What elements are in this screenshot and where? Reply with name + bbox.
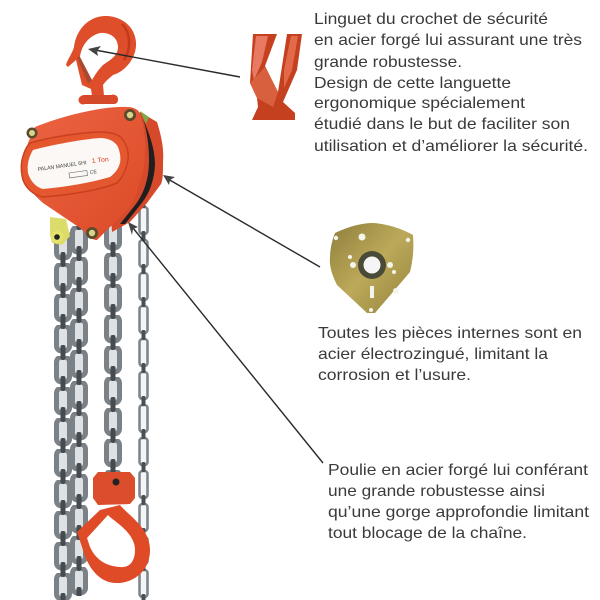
arrow: pulley <box>128 222 323 463</box>
text block: internal parts: acier électrozingué, limitant la <box>318 346 548 363</box>
chain: thin hand chain <box>138 205 149 600</box>
text block: pulley: une grande robustesse ainsi <box>328 483 545 500</box>
text block: safety hook: ergonomique spécialement <box>314 95 526 112</box>
text block: internal parts: corrosion et l’usure. <box>318 367 471 384</box>
text block: internal parts: Toutes les pièces internes sont en <box>318 325 582 342</box>
nameplate: CE <box>89 169 98 176</box>
text block: safety hook: Linguet du crochet de sécurité <box>314 11 548 28</box>
nameplate <box>28 138 120 189</box>
text block: safety hook: utilisation et d’améliorer la sécurité. <box>314 138 588 155</box>
nameplate: PALAN MANUEL 6Ht <box>37 160 87 173</box>
hook opening <box>80 33 118 80</box>
chain: second strand <box>70 226 88 596</box>
body front cover <box>21 107 145 240</box>
text block: safety hook: Design de cette languette <box>314 75 511 92</box>
text block: safety hook: grande robustesse. <box>314 54 462 71</box>
icon: latch detail photo <box>250 34 302 120</box>
icon: yellow side bracket <box>50 217 70 245</box>
text block: safety hook <box>314 11 588 155</box>
text block: pulley <box>328 462 590 542</box>
chain: load strand <box>104 222 122 472</box>
text block: pulley: tout blocage de la chaîne. <box>328 525 527 542</box>
text block: pulley: Poulie en acier forgé lui conférant <box>328 462 589 479</box>
panel: hoist body <box>21 107 163 240</box>
nameplate: 1 Ton <box>91 156 110 165</box>
text block: safety hook: étudié dans le but de faciliter son <box>314 116 570 133</box>
icon: lower hook block <box>77 472 150 583</box>
chains <box>54 205 149 600</box>
arrow: internal parts <box>163 175 320 267</box>
chain: left strand <box>54 232 72 600</box>
bolts <box>26 128 38 138</box>
text block: safety hook: en acier forgé lui assurant une très <box>314 32 582 49</box>
text block: pulley: qu’une gorge approfondie limitant <box>328 504 590 521</box>
label recess <box>21 132 128 197</box>
text block: internal parts <box>318 325 582 384</box>
icon: zinc plated plate <box>330 223 413 313</box>
body rear plates <box>110 112 163 232</box>
icon: top hook <box>66 16 136 104</box>
arrow: hook latch <box>88 46 240 77</box>
